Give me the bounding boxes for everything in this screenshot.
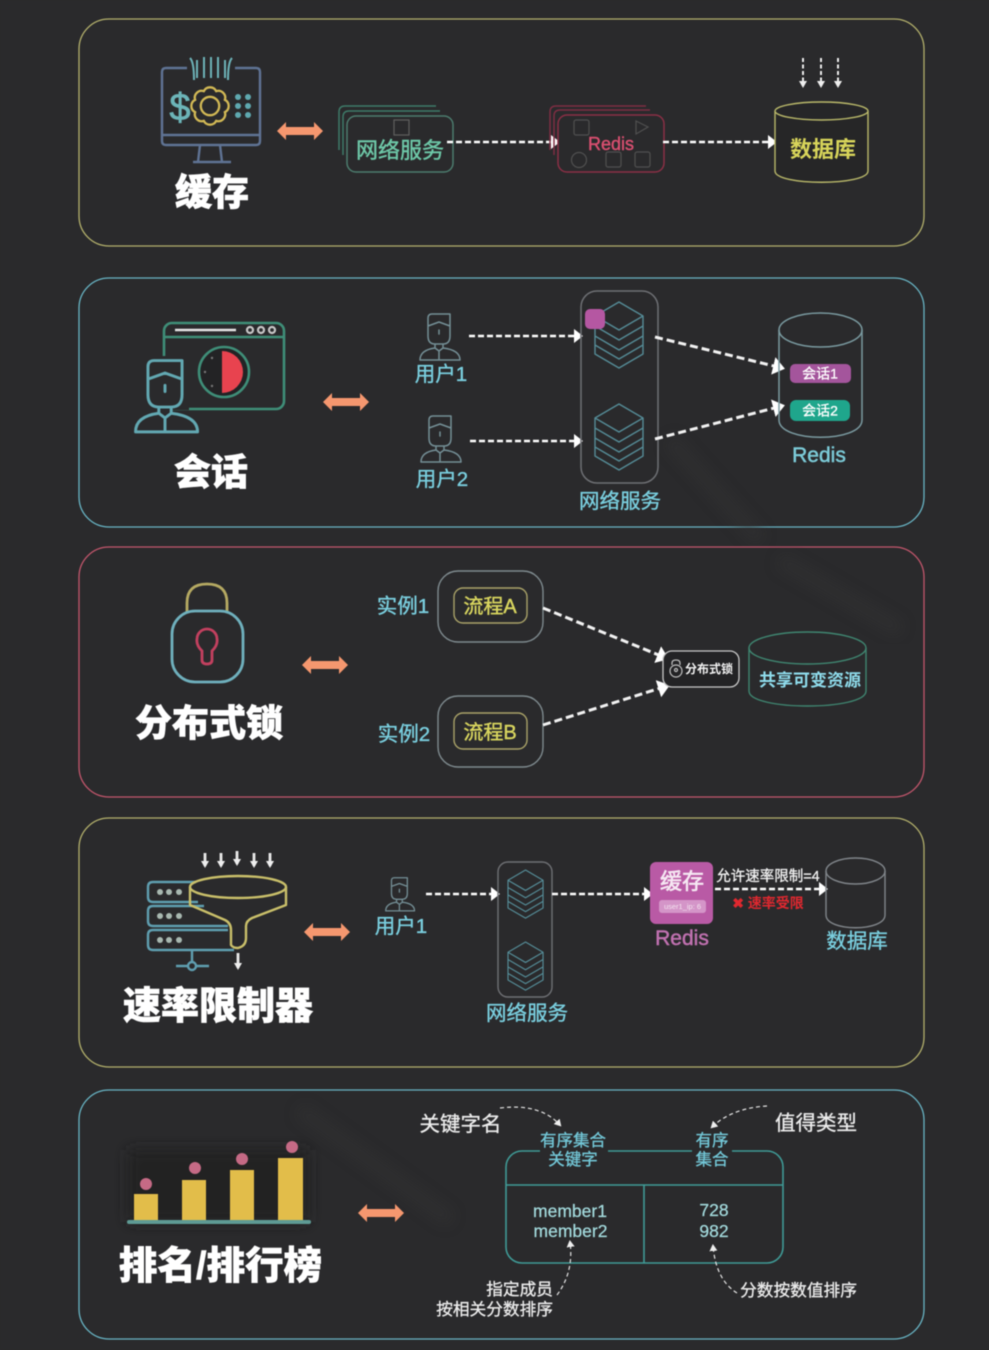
arrow: user to service <box>426 893 498 895</box>
pill: 会话2: 会话2 <box>802 402 838 418</box>
arrow: user 1 to service <box>469 335 581 337</box>
instance box A: 流程A <box>463 595 517 618</box>
curved arrow: key name <box>500 1107 560 1125</box>
arrow: server 2 to redis <box>655 406 782 439</box>
icon: monitor with gear: $ <box>169 87 191 129</box>
cache box: Redis <box>650 862 713 950</box>
values: members: member1 <box>533 1201 607 1221</box>
pill: 会话1: 会话1 <box>802 366 838 382</box>
curved arrow: members <box>557 1242 571 1295</box>
icon: browser window, clock and person <box>134 323 284 432</box>
pill: 会话1 <box>790 364 851 383</box>
values: members: member2 <box>534 1221 607 1241</box>
sorted set table <box>506 1131 783 1263</box>
label: 值得类型: 值得类型 <box>775 1112 857 1135</box>
arrow: double orange <box>277 122 323 140</box>
heading: 分布式锁: 分布式锁 <box>135 703 283 744</box>
arrow: double orange <box>304 923 350 941</box>
label: 指定成员 按相关分数排序 <box>436 1280 553 1319</box>
arrow: cache to database <box>715 888 826 890</box>
label: 实例2: 实例2 <box>378 723 430 746</box>
curved arrow: scores <box>713 1246 737 1293</box>
icon: padlock <box>172 584 243 682</box>
user 1 <box>375 878 427 938</box>
user 1: 用户1 <box>415 363 467 386</box>
instance box B <box>438 696 543 767</box>
stack: Redis <box>550 106 664 172</box>
curved arrow: value type <box>712 1106 767 1127</box>
panel: 排名/排行榜 ranking <box>79 1090 924 1339</box>
user 1: 用户1 <box>375 915 427 938</box>
arrow: redis to database <box>663 141 775 143</box>
header: 有序集合 关键字: 有序集合 <box>540 1131 606 1150</box>
arrow: server 1 to redis <box>655 337 782 368</box>
panel: 速率限制器 rate limiter <box>79 818 924 1067</box>
arrow: A to lock <box>543 608 666 658</box>
cylinder: Redis sessions <box>779 313 862 467</box>
box: 网络服务 servers <box>579 291 661 513</box>
heading: 会话: 会话 <box>174 452 248 493</box>
arrow: service to cache <box>552 893 651 895</box>
icon: bar chart with dots <box>127 1141 311 1224</box>
stack: Redis: Redis <box>588 134 634 154</box>
values: members <box>533 1201 607 1241</box>
icon: monitor with gear <box>162 57 260 162</box>
heading: 排名/排行榜: 排名/排行榜 <box>119 1245 322 1288</box>
header: 有序集合 关键字 <box>540 1131 606 1169</box>
faint watermark smudge <box>300 1110 450 1220</box>
badge: 分布式锁 <box>663 651 739 687</box>
arrows: three down <box>803 58 838 86</box>
cache box: Redis: 缓存 <box>660 869 704 894</box>
cylinder: 共享可变资源: 共享可变资源 <box>759 670 861 690</box>
label: 指定成员 按相关分数排序: 指定成员 <box>486 1280 553 1299</box>
label: 速率受限: ✖ 速率受限 <box>732 895 804 911</box>
arrow: double orange <box>358 1204 404 1222</box>
label: 实例1: 实例1 <box>377 595 429 618</box>
header: 有序集合 关键字: 关键字 <box>548 1150 598 1169</box>
stack: 网络服务: 网络服务 <box>356 138 444 163</box>
cylinder: 共享可变资源 <box>749 632 866 706</box>
faint watermark smudge <box>780 560 900 630</box>
pill: 会话2 <box>790 400 850 421</box>
user 2 <box>416 416 468 491</box>
faint watermark smudge <box>670 440 760 540</box>
box: 网络服务 servers: 网络服务 <box>486 1002 568 1025</box>
panel: 分布式锁 distributed lock <box>79 547 924 797</box>
label: 分数按数值排序: 分数按数值排序 <box>740 1281 857 1300</box>
badge: 分布式锁: 分布式锁 <box>685 661 733 676</box>
arrow: double orange <box>302 656 348 674</box>
instance box B: 流程B <box>463 721 517 744</box>
panel: 缓存 cache <box>79 19 924 246</box>
header: 有序 集合: 集合 <box>696 1150 728 1169</box>
cylinder: 数据库 <box>826 858 888 953</box>
values: scores: 982 <box>699 1221 729 1241</box>
stack: 网络服务 <box>339 106 453 172</box>
user 1 <box>415 314 467 386</box>
panel: 会话 session <box>79 278 924 540</box>
user 2: 用户2 <box>416 468 468 491</box>
cylinder: 数据库 <box>775 102 868 182</box>
header: 有序 集合 <box>696 1131 728 1169</box>
icon: funnel over servers <box>148 851 286 970</box>
instance box A <box>438 571 543 642</box>
label: 指定成员 按相关分数排序: 按相关分数排序 <box>436 1300 553 1319</box>
heading: 速率限制器: 速率限制器 <box>123 986 313 1028</box>
box: 网络服务 servers <box>486 862 568 1025</box>
cylinder: Redis sessions: Redis <box>792 444 846 467</box>
cylinder: 数据库: 数据库 <box>790 137 856 162</box>
arrow: service to redis <box>447 141 558 143</box>
label: 关键字名: 关键字名 <box>420 1113 502 1136</box>
heading: 缓存: 缓存 <box>175 172 249 213</box>
arrow: B to lock <box>543 686 667 725</box>
label: 允许速率限制=4: 允许速率限制=4 <box>716 868 820 885</box>
values: scores <box>699 1200 729 1241</box>
header: 有序 集合: 有序 <box>696 1131 728 1150</box>
arrow: user 2 to service <box>470 440 581 442</box>
cylinder: 数据库: 数据库 <box>826 930 888 953</box>
cache box: Redis: Redis <box>655 927 709 950</box>
cache box: Redis: user1_ip: 6 <box>664 902 701 911</box>
arrow: double orange <box>323 393 369 411</box>
box: 网络服务 servers: 网络服务 <box>579 490 661 513</box>
values: scores: 728 <box>699 1200 729 1220</box>
